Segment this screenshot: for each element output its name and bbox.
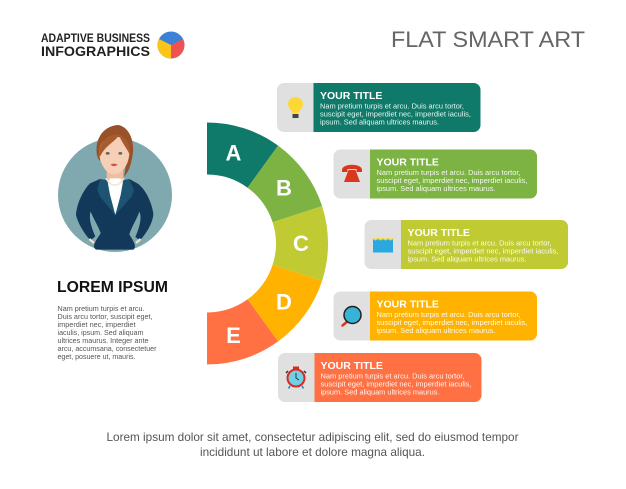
segment E: E xyxy=(226,323,241,348)
panel: card D: ipsum. Sed aliquam ultrices maurus. xyxy=(376,326,496,335)
panel: card C: YOUR TITLE xyxy=(408,227,470,239)
panel: card B: YOUR TITLE xyxy=(376,156,439,168)
text block: description: ultrices maurus. Integer ante xyxy=(58,336,148,345)
panel: card C xyxy=(364,220,568,269)
title: FLAT SMART ART xyxy=(391,27,585,52)
panel: card A: ipsum. Sed aliquam ultrices maurus. xyxy=(320,118,439,126)
footer text: Lorem ipsum dolor sit amet, consectetur adipiscing elit, sed do eiusmod tempor xyxy=(106,430,518,444)
logo heading: ADAPTIVE BUSINESS xyxy=(41,33,150,45)
segment D: D xyxy=(276,290,292,314)
portrait: businesswoman xyxy=(58,125,172,252)
panel: card E: Nam pretium turpis et arcu. Duis arcu tortor, xyxy=(320,372,464,380)
segment B: B xyxy=(276,176,292,200)
panel: card A: YOUR TITLE xyxy=(320,90,382,102)
footer text xyxy=(106,430,518,459)
panel: card B: Nam pretium turpis et arcu. Duis arcu tortor, xyxy=(376,168,520,177)
panel: card D: YOUR TITLE xyxy=(376,298,439,310)
segment E xyxy=(207,299,278,364)
panel: card B: ipsum. Sed aliquam ultrices maurus. xyxy=(376,184,496,193)
text block: description: imperdiet nec, imperdiet xyxy=(58,320,136,329)
icon: telephone xyxy=(342,165,362,182)
text block: description: arcu, accumsana, consectetuer xyxy=(58,344,157,353)
panel: card A xyxy=(277,83,480,132)
segment A xyxy=(207,122,278,188)
text block: description: eget, posuere ut, mauris. xyxy=(58,352,136,361)
text block: description: Nam pretium turpis et arcu. xyxy=(58,304,144,313)
segment C: C xyxy=(293,231,309,256)
panel: card D: Nam pretium turpis et arcu. Duis arcu tortor, xyxy=(376,310,520,319)
segment C xyxy=(273,206,328,281)
panel: card E xyxy=(278,353,482,402)
panel: card E: YOUR TITLE xyxy=(320,360,383,372)
heading: lorem ipsum: LOREM IPSUM xyxy=(57,279,168,296)
chart: semicircle segments xyxy=(207,122,328,364)
panel: card C: suscipit eget, imperdiet nec, imperdiet iaculis, xyxy=(408,246,558,256)
text block: description: Duis arcu tortor, suscipit eget, xyxy=(58,312,152,321)
panel: card A: suscipit eget, imperdiet nec, imperdiet iaculis, xyxy=(320,110,471,118)
panel: card C: ipsum. Sed aliquam ultrices maurus. xyxy=(408,254,526,264)
panel: card D xyxy=(334,292,537,340)
panel: card B: suscipit eget, imperdiet nec, imperdiet iaculis, xyxy=(376,176,528,185)
logo heading xyxy=(41,33,150,59)
icon: alarm clock xyxy=(286,366,306,388)
footer text: incididunt ut labore et dolore magna aliqua. xyxy=(200,445,425,459)
panel: card B xyxy=(334,150,537,198)
segment D xyxy=(248,265,322,341)
panel: card D: suscipit eget, imperdiet nec, imperdiet iaculis, xyxy=(376,318,528,327)
panel: card A: Nam pretium turpis et arcu. Duis arcu tortor, xyxy=(320,102,464,110)
icon: calendar xyxy=(373,238,393,252)
segment A: A xyxy=(226,140,242,166)
panel: card E: suscipit eget, imperdiet nec, imperdiet iaculis, xyxy=(320,380,472,388)
panel: card C: Nam pretium turpis et arcu. Duis arcu tortor, xyxy=(408,238,552,248)
icon: logo pie xyxy=(158,32,184,58)
segment B xyxy=(248,146,322,222)
text block: description: iaculis, ipsum. Sed aliquam xyxy=(58,328,144,337)
panel: card E: ipsum. Sed aliquam ultrices maurus. xyxy=(320,388,440,396)
icon: magnifier xyxy=(342,306,361,326)
text block: description xyxy=(58,304,157,361)
logo heading: INFOGRAPHICS xyxy=(41,43,150,59)
icon: light bulb xyxy=(288,97,303,118)
